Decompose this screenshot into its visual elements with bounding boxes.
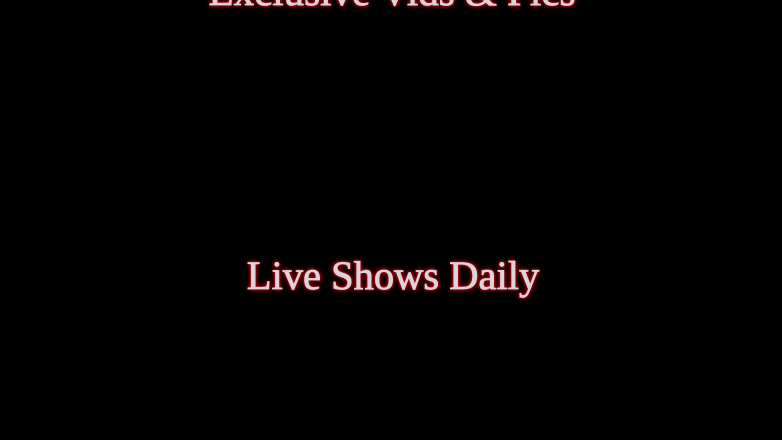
text: Live Shows Daily: Live Shows Daily: [247, 253, 539, 298]
